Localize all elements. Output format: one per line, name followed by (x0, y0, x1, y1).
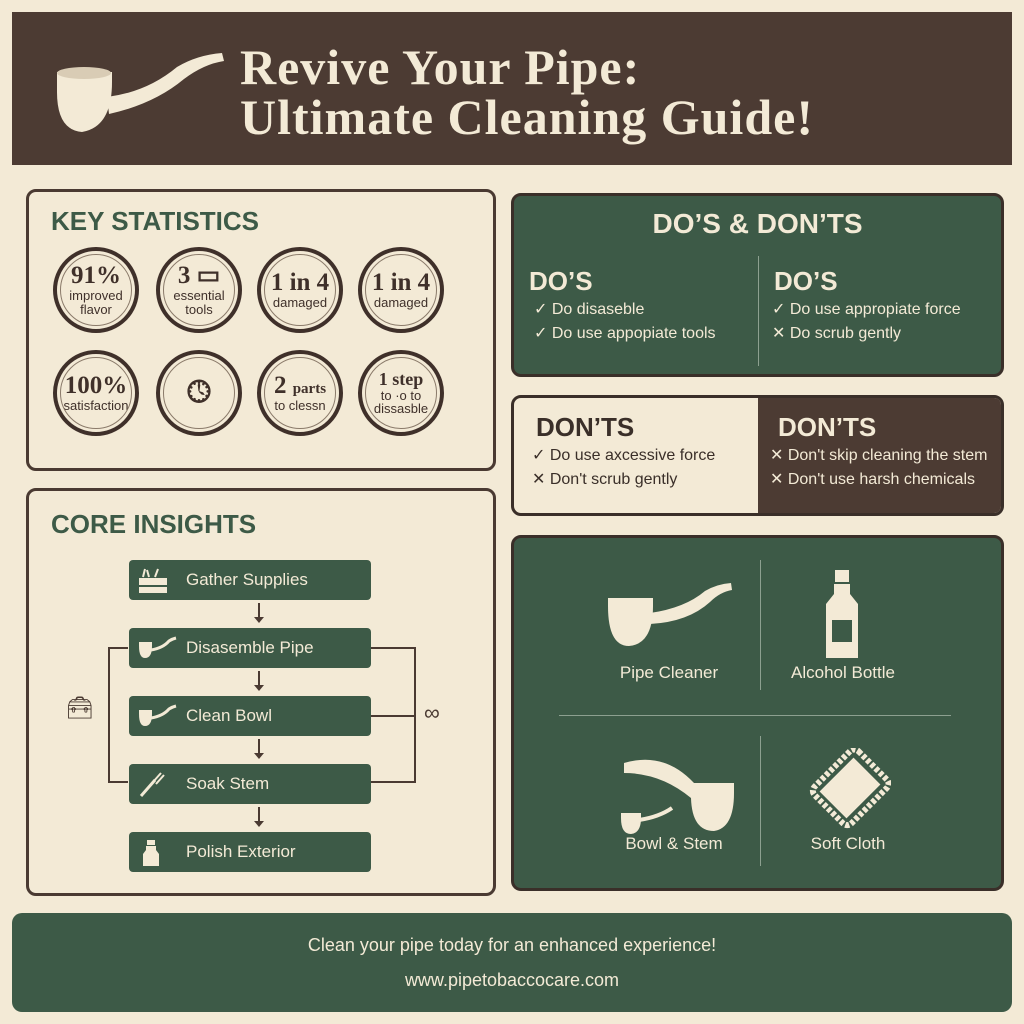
panel: don'ts: DON’TS (778, 412, 876, 442)
panel: do's: ✓ Do use appropiate force (772, 301, 961, 318)
panel: don'ts: ✓ Do use axcessive force (532, 447, 715, 464)
panel: don'ts (511, 395, 1004, 516)
stat circles: 🕓︎ (187, 376, 211, 409)
panel: tools: Soft Cloth (811, 834, 885, 853)
panel: don'ts: ✕ Don't skip cleaning the stem (770, 447, 987, 464)
panel: don'ts: ✕ Don't scrub gently (532, 471, 677, 488)
flowchart: 🧰︎ (66, 695, 94, 720)
stat circles: 91% (71, 262, 121, 289)
icon: alcohol bottle (826, 570, 858, 658)
panel: don'ts: ✕ Don't use harsh chemicals (770, 471, 975, 488)
flowchart (66, 560, 440, 872)
stat circles: satisfaction (63, 398, 129, 413)
stat circles (53, 247, 444, 436)
stat circles: to clessn (274, 398, 326, 413)
panel: do's: ✓ Do disaseble (534, 301, 644, 318)
panel: do's: DO’S & DON’TS (652, 208, 862, 239)
panel: tools: Bowl & Stem (625, 834, 723, 853)
stat circles: 1 step (379, 369, 423, 389)
panel: tools: Alcohol Bottle (791, 663, 895, 682)
heading: core insights: CORE INSIGHTS (51, 509, 256, 539)
panel: do's: DO’S (774, 266, 838, 296)
flowchart: Polish Exterior (186, 842, 296, 861)
title: Revive Your Pipe: (240, 39, 640, 95)
panel: do's: ✕ Do scrub gently (772, 325, 901, 342)
stat circles: 100% (65, 372, 127, 399)
stat circles: essential (173, 288, 225, 303)
footer: www.pipetobaccocare.com (405, 970, 619, 990)
icon: soft cloth (810, 748, 891, 828)
stat circles: dissasble (374, 401, 428, 416)
stat circles: tools (185, 302, 213, 317)
header banner (12, 12, 1012, 165)
flowchart: ∞ (424, 700, 440, 725)
flowchart: Disasemble Pipe (186, 638, 314, 657)
flowchart: Soak Stem (186, 774, 269, 793)
flowchart: Gather Supplies (186, 570, 308, 589)
panel: do's: ✓ Do use appopiate tools (534, 325, 716, 342)
icon: pipe (57, 53, 224, 132)
title: Ultimate Cleaning Guide! (240, 89, 814, 145)
panel: core insights (26, 488, 496, 896)
stat circles: 1 in 4 (372, 269, 430, 296)
stat circles: 2 parts (274, 372, 326, 399)
panel: do's (511, 193, 1004, 377)
panel: tools: Pipe Cleaner (620, 663, 718, 682)
stat circles: flavor (80, 302, 112, 317)
flowchart: Clean Bowl (186, 706, 272, 725)
panel: do's: DO’S (529, 266, 593, 296)
stat circles: to ·o to (381, 388, 421, 403)
title (240, 39, 814, 145)
stat circles: improved (69, 288, 123, 303)
stat circles: damaged (273, 295, 327, 310)
panel: tools (511, 535, 1004, 891)
panel: key statistics (26, 189, 496, 471)
icon: bowl & stem (621, 760, 734, 834)
stat circles: 3 ▭ (178, 262, 220, 289)
footer: Clean your pipe today for an enhanced experience! (308, 935, 716, 955)
stat circles: damaged (374, 295, 428, 310)
icon: pipe cleaner (608, 583, 732, 646)
panel: don'ts: DON’TS (536, 412, 634, 442)
heading: key statistics: KEY STATISTICS (51, 206, 259, 236)
stat circles: 1 in 4 (271, 269, 329, 296)
footer (12, 913, 1012, 1012)
